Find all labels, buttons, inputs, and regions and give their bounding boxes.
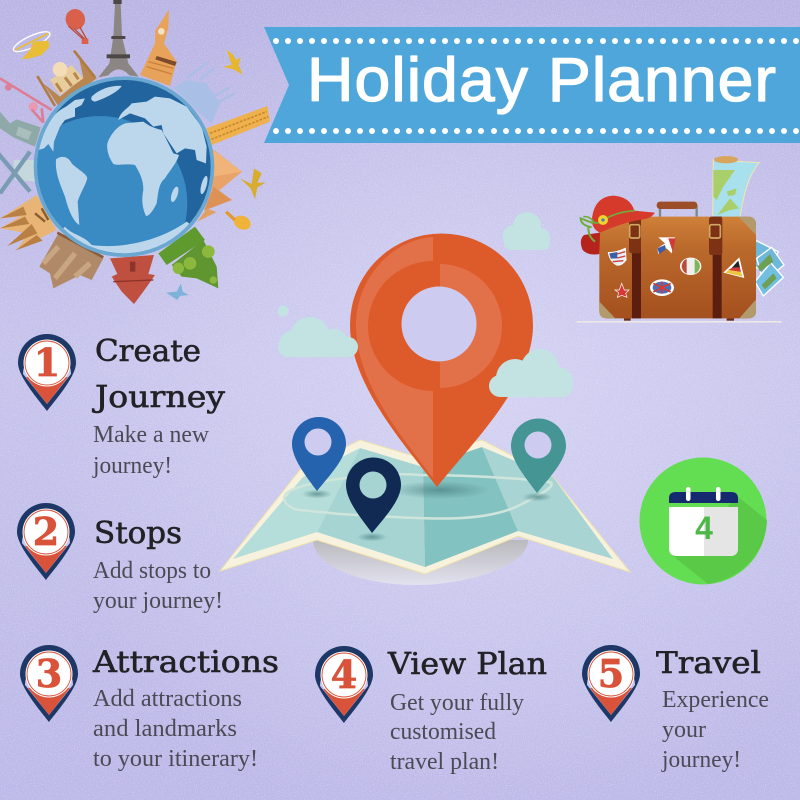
icon: blue plane [166, 283, 189, 300]
landmark: hot air balloon [63, 7, 88, 44]
rolled map [713, 156, 759, 218]
step 3 description: to your itinerary! [93, 746, 258, 772]
handle [657, 202, 697, 217]
step 1 heading: Journey [92, 380, 225, 415]
step 5 heading: Travel [656, 646, 761, 681]
landmark: Taj Mahal [37, 51, 97, 106]
pin shadows [302, 481, 552, 542]
step 1 description: Make a new [93, 422, 210, 448]
step 5 pin [582, 645, 640, 722]
icon: yellow balloon [226, 212, 253, 232]
step 4 pin [315, 646, 373, 723]
step 2 pin [17, 503, 75, 580]
case body [599, 217, 756, 318]
step 3 pin: 3 [36, 651, 62, 696]
clouds in front of pin [278, 317, 573, 397]
landmark: blue mosque [173, 63, 235, 123]
teal map pin [511, 418, 566, 493]
landmark: Big Ben [140, 9, 177, 86]
step 1 pin [18, 334, 76, 411]
step 4 description: travel plan! [390, 749, 499, 775]
title: Holiday Planner [307, 46, 777, 115]
step 5 description: your [662, 717, 706, 743]
step 4 description: Get your fully [390, 690, 524, 716]
step 1 [18, 334, 225, 479]
icon: yellow plane right [240, 168, 266, 199]
blue map pin [292, 417, 346, 491]
landmark: windmill [0, 152, 37, 193]
landmark: Statue of Liberty [0, 112, 41, 147]
landmark: Sagrada Familia [0, 195, 57, 251]
cloud: left [278, 317, 358, 357]
landmark: Mount Rushmore [39, 233, 103, 288]
step 5 pin: 5 [598, 651, 624, 696]
cloud: top right [503, 212, 550, 250]
stickers [608, 237, 744, 297]
case corners [599, 217, 756, 318]
step 3 [20, 645, 279, 772]
step 2 [17, 503, 223, 614]
step 1 description: journey! [92, 453, 172, 479]
step 5 [582, 645, 769, 773]
travel photos [755, 240, 784, 296]
landmark: Shanghai tower [0, 78, 52, 123]
feet and ground line [577, 318, 782, 323]
step 3 description: and landmarks [93, 716, 237, 742]
folded map [220, 440, 630, 574]
navy map pin [346, 458, 401, 533]
continents [39, 86, 208, 254]
banner dots [273, 38, 799, 134]
step 3 pin [20, 645, 78, 722]
map shadow [313, 540, 528, 585]
clouds behind pin [278, 212, 550, 316]
step 4 pin: 4 [331, 652, 357, 697]
step 1 pin: 1 [34, 340, 60, 385]
globe with world landmarks [0, 0, 270, 304]
leather straps [629, 217, 722, 318]
step 4 [315, 646, 547, 775]
cloud dot [278, 306, 288, 316]
landmark: St Basil's Cathedral [158, 227, 218, 288]
landmark: Eiffel Tower [98, 0, 139, 77]
calendar number: 4 [695, 510, 713, 546]
map route [284, 474, 552, 519]
globe body [34, 76, 214, 257]
cloud: right [489, 349, 573, 397]
step 3 description: Add attractions [93, 686, 242, 712]
step 5 description: journey! [661, 747, 741, 773]
step 2 heading: Stops [94, 516, 182, 551]
icon: yellow plane top [223, 49, 243, 75]
step 4 heading: View Plan [387, 647, 547, 682]
landmark: red pagoda [110, 255, 155, 304]
step 5 description: Experience [662, 687, 769, 713]
title banner [264, 27, 800, 143]
calendar icon [640, 458, 767, 584]
suitcase illustration [577, 156, 784, 323]
icon: helicopter [11, 28, 52, 59]
landmark: leaning tower of Pisa [207, 106, 270, 145]
large orange location pin [350, 234, 533, 487]
step 2 description: your journey! [93, 588, 223, 614]
red sun hat [581, 196, 655, 254]
step 4 description: customised [390, 719, 496, 745]
step 2 description: Add stops to [93, 558, 211, 584]
landmark: pyramids [197, 149, 242, 222]
step 1 heading: Create [95, 334, 201, 369]
step 2 pin: 2 [33, 509, 59, 554]
step 3 heading: Attractions [92, 645, 279, 680]
